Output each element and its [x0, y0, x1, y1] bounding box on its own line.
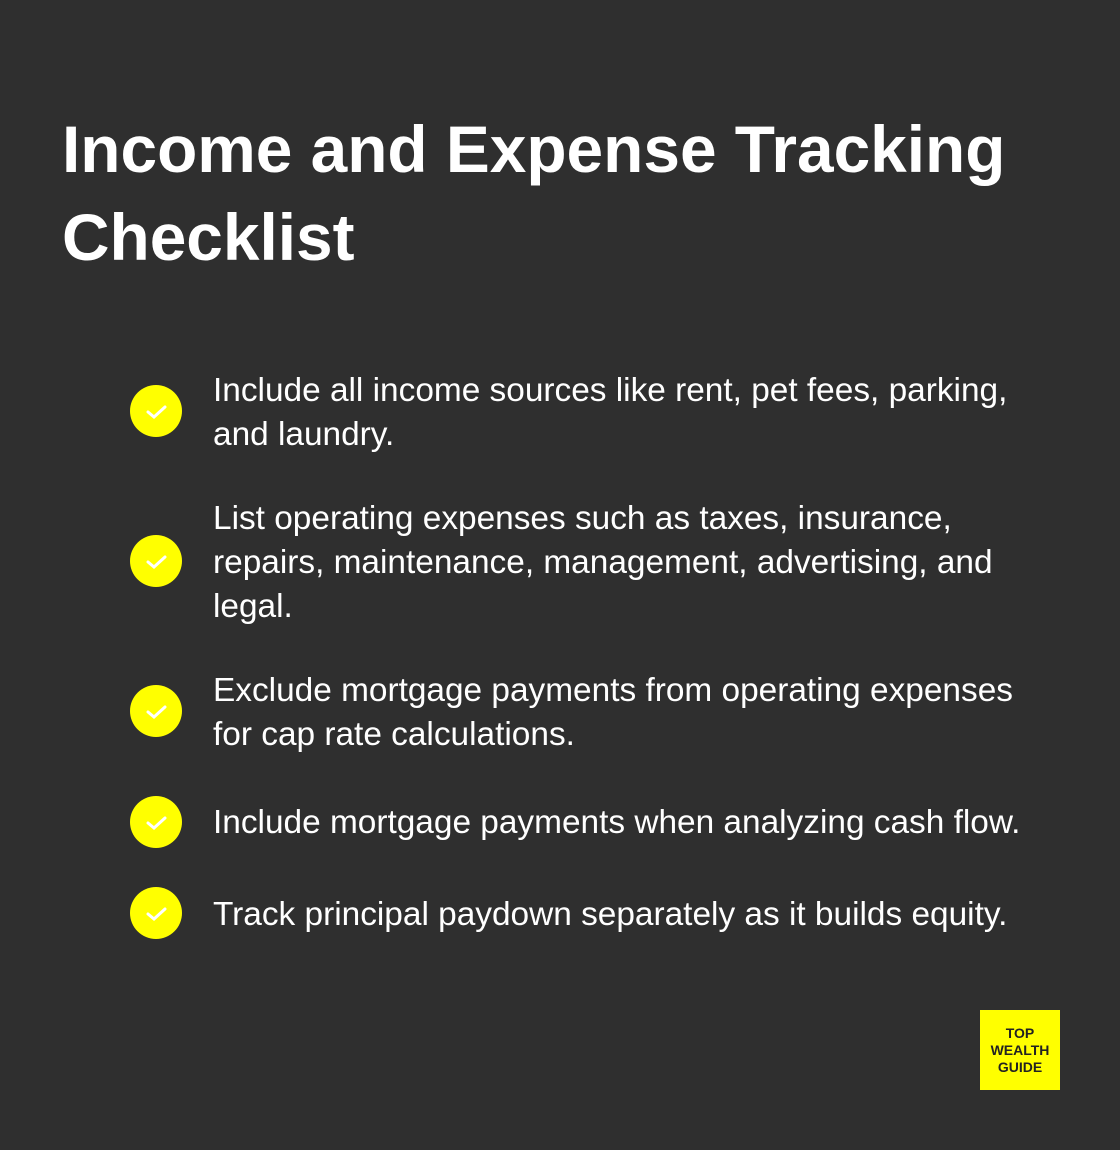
checklist item 3	[130, 672, 1013, 753]
text: item 4: Include mortgage payments when analyzing cash flow.	[213, 804, 1020, 841]
text: item 1: and laundry.	[213, 416, 394, 453]
text: item 1: Include all income sources like rent, pet fees, parking,	[213, 372, 1007, 409]
text: item 5: Track principal paydown separately as it builds equity.	[213, 896, 1007, 933]
logo: TOP	[1006, 1024, 1034, 1040]
text: item 3	[213, 672, 1013, 753]
icon: check	[130, 796, 182, 848]
text: item 3: Exclude mortgage payments from operating expenses	[213, 672, 1013, 709]
icon: check	[130, 385, 182, 437]
checklist item 2	[130, 500, 993, 625]
title: Checklist	[62, 200, 355, 274]
text: item 2: List operating expenses such as taxes, insurance,	[213, 500, 952, 537]
icon: check	[130, 535, 182, 587]
icon: check	[130, 887, 182, 939]
text: item 2: repairs, maintenance, management, advertising, and	[213, 544, 993, 581]
checklist item 4	[130, 796, 1020, 848]
logo	[980, 1010, 1060, 1090]
text: item 3: for cap rate calculations.	[213, 716, 575, 753]
title: Income and Expense Tracking	[62, 112, 1005, 186]
logo: WEALTH	[991, 1042, 1049, 1058]
text: item 2: legal.	[213, 588, 293, 625]
text: item 1	[213, 372, 1007, 453]
icon: check	[130, 685, 182, 737]
logo: GUIDE	[998, 1058, 1042, 1074]
checklist item 5	[130, 887, 1007, 939]
title	[62, 112, 1005, 274]
text: item 2	[213, 500, 993, 625]
checklist item 1	[130, 372, 1007, 453]
